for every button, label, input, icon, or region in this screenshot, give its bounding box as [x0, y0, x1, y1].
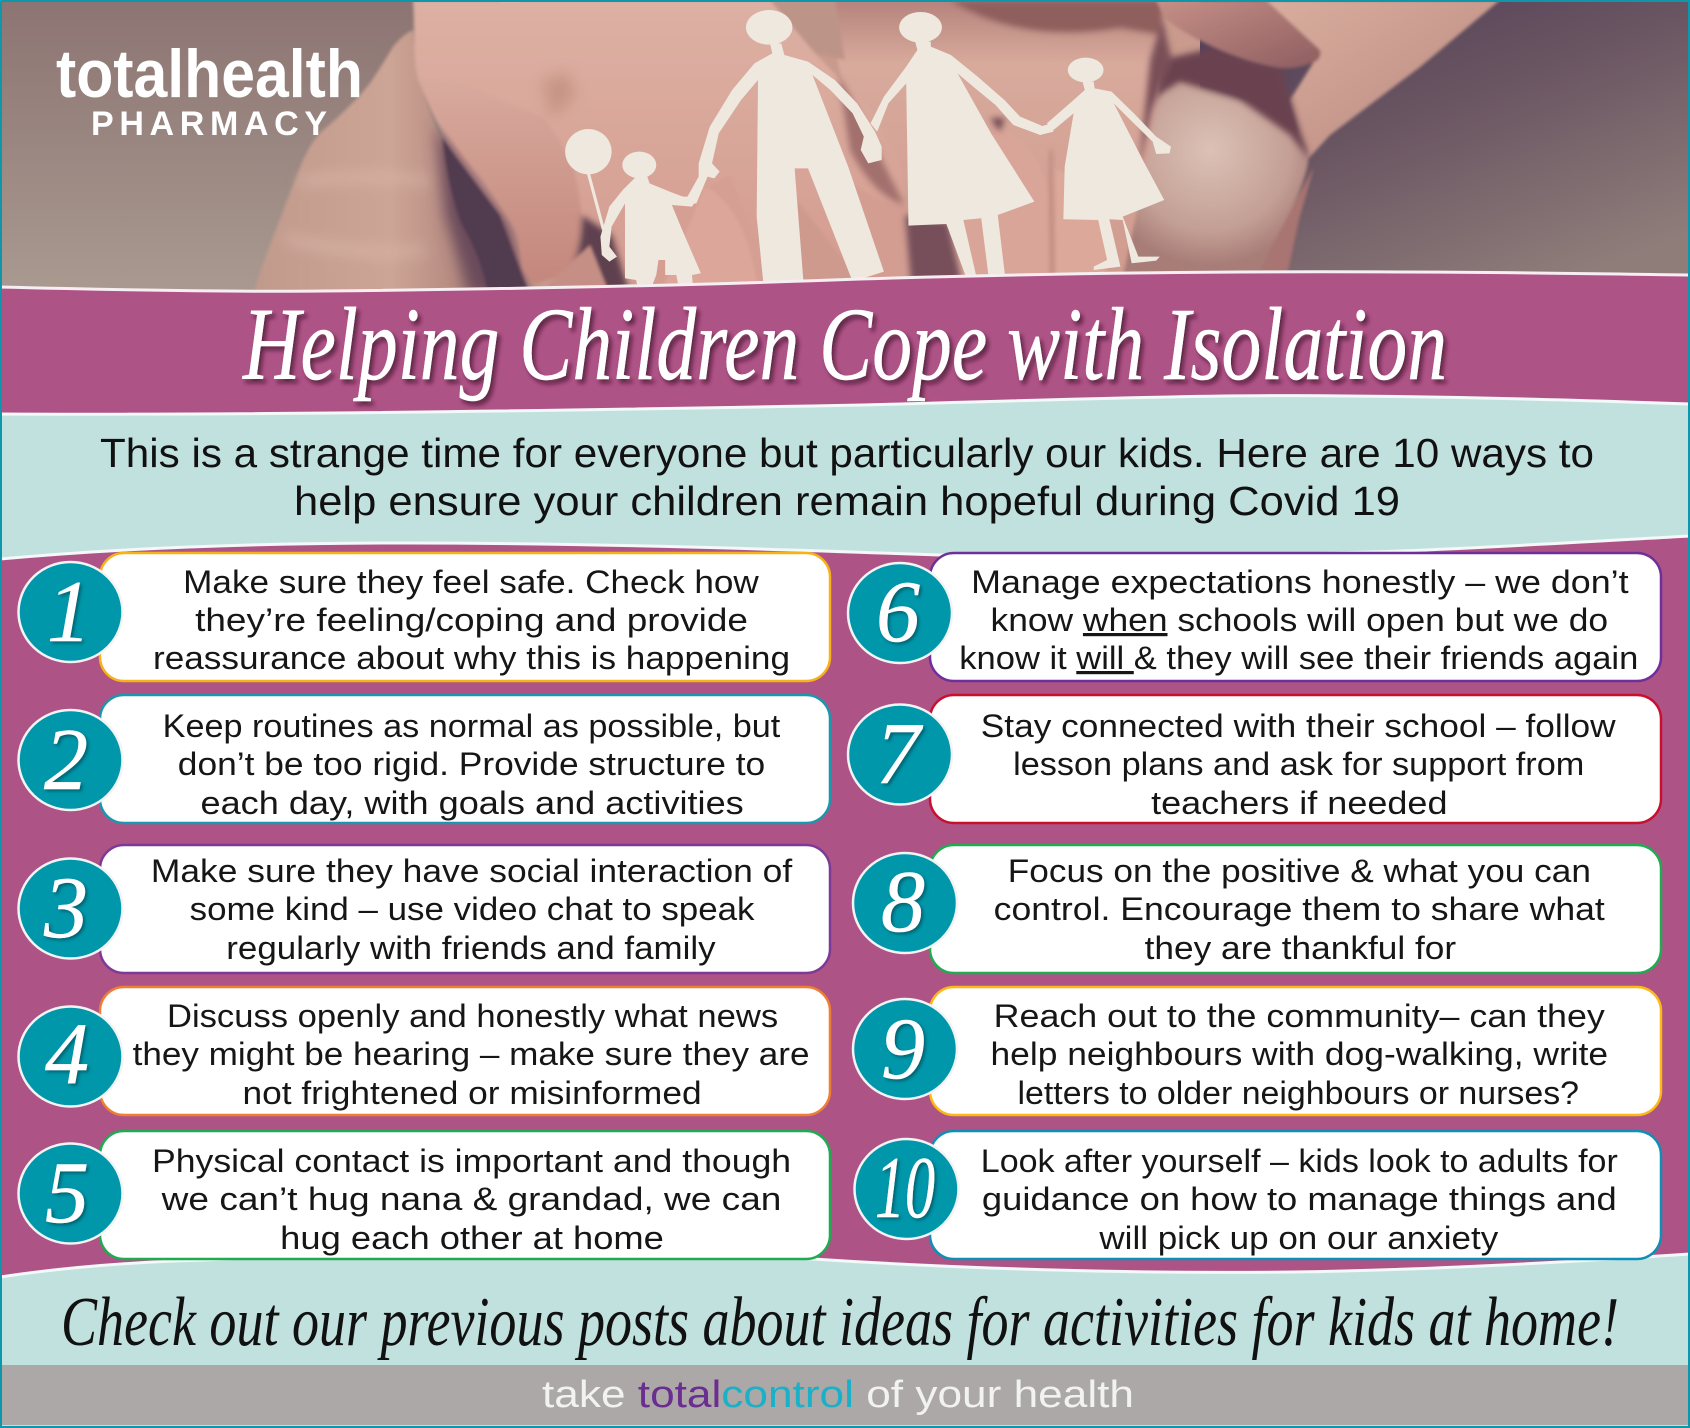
- tip 4: [100, 987, 830, 1115]
- tip 9 text: Reach out to the community– can they: [994, 998, 1605, 1034]
- tip 9 text: [990, 998, 1608, 1111]
- right palm: [835, 2, 1160, 272]
- tip 9: [930, 987, 1661, 1115]
- tip 4 text: [133, 998, 810, 1111]
- right hand knuckle: [1123, 83, 1310, 272]
- tip 2 text: don’t be too rigid. Provide structure to: [178, 746, 765, 782]
- tip 10 text: Look after yourself – kids look to adults for: [981, 1143, 1618, 1179]
- dark gap under thumb: [572, 212, 630, 285]
- sliver of wrist: [1260, 170, 1314, 270]
- tip 3 text: regularly with friends and family: [226, 930, 716, 966]
- shadow above knuckle: [1150, 48, 1310, 160]
- tip 4 text: Discuss openly and honestly what news: [167, 998, 778, 1034]
- tip 5 text: we can’t hug nana & grandad, we can: [161, 1181, 781, 1217]
- fingers lower right: [964, 256, 1046, 274]
- tip 6 text: know when schools will open but we do: [990, 602, 1608, 638]
- photo: paper family cut-outs: [565, 10, 1171, 287]
- number badge 6: [848, 563, 952, 663]
- tip 7 text: Stay connected with their school – follow: [981, 708, 1617, 744]
- intro text: This is a strange time for everyone but particularly our kids. Here are 10 ways to: [100, 430, 1594, 476]
- number badge 2: 2: [44, 712, 88, 809]
- tip 3 text: [151, 853, 792, 966]
- finger, top right: [1156, 0, 1321, 68]
- lower fingers: [666, 275, 678, 284]
- tip 8 text: control. Encourage them to share what: [994, 891, 1605, 927]
- left palm: [413, 0, 906, 295]
- paper figure: father: [672, 10, 884, 283]
- tip 8 text: [994, 853, 1605, 966]
- tip 2 text: each day, with goals and activities: [200, 785, 744, 821]
- tip 8: [930, 845, 1661, 973]
- tip 7: [930, 695, 1661, 823]
- tip 8 text: Focus on the positive & what you can: [1008, 853, 1591, 889]
- right-palm fold: [950, 0, 1162, 35]
- tip 10 text: will pick up on our anxiety: [1098, 1220, 1498, 1256]
- number badge 10: 10: [875, 1140, 935, 1237]
- tip 3 text: Make sure they have social interaction of: [151, 853, 792, 889]
- tip 6 text: know it will & they will see their friends again: [959, 640, 1638, 676]
- paper figure: mother: [871, 12, 1054, 278]
- photo: paper family held in cupped hands: [0, 0, 1690, 295]
- paper figure: daughter: [1047, 58, 1171, 270]
- number badge 1: [18, 562, 122, 662]
- number badge 9: [853, 999, 957, 1099]
- logo: totalhealth pharmacy: [56, 36, 363, 143]
- dark gap between thumb and back hand: [442, 138, 530, 295]
- intro text: [100, 430, 1594, 524]
- number badge 5: [18, 1144, 122, 1244]
- logo: totalhealth pharmacy: PHARMACY: [91, 105, 327, 143]
- tip 1 text: Make sure they feel safe. Check how: [183, 564, 760, 600]
- left thumb: [448, 131, 582, 282]
- tip 3: [100, 845, 830, 973]
- number badge 3: 3: [43, 860, 88, 957]
- number badge 1: 1: [47, 564, 91, 661]
- paper figure: child with balloon: [565, 129, 701, 287]
- tip 1 text: [153, 564, 790, 676]
- tip 7 text: [981, 708, 1617, 821]
- intro text: help ensure your children remain hopeful during Covid 19: [294, 478, 1400, 524]
- tip 10: [930, 1131, 1661, 1259]
- tip 7 text: lesson plans and ask for support from: [1013, 746, 1584, 782]
- tip 1 text: they’re feeling/coping and provide: [195, 602, 748, 638]
- tip 6 text: Manage expectations honestly – we don’t: [971, 564, 1629, 600]
- footer panel: [0, 1252, 1690, 1428]
- soft shadow beside thumb: [436, 125, 530, 295]
- photo background: fabric: [0, 0, 1690, 295]
- tip 1 text: reassurance about why this is happening: [153, 640, 790, 676]
- tip 9 text: letters to older neighbours or nurses?: [1018, 1075, 1579, 1111]
- tagline text: take total control of your health: [542, 1374, 1134, 1416]
- tip 5: [100, 1131, 830, 1259]
- tip 3 text: some kind – use video chat to speak: [190, 891, 756, 927]
- number badge 8: [853, 853, 957, 953]
- number badge 7: [848, 704, 952, 804]
- tip 9 text: help neighbours with dog-walking, write: [990, 1036, 1608, 1072]
- tip 8 text: they are thankful for: [1145, 930, 1456, 966]
- tagline bar: [0, 1365, 1690, 1425]
- number badge 6: 6: [876, 564, 920, 661]
- dark line beside right palm: [1138, 20, 1172, 175]
- number badge 9: 9: [881, 1001, 925, 1098]
- logo: totalhealth pharmacy: totalhealth: [56, 36, 363, 112]
- tip 7 text: teachers if needed: [1151, 785, 1448, 821]
- tip 4 text: not frightened or misinformed: [242, 1075, 702, 1111]
- forearm, top right: [1262, 0, 1500, 160]
- tip 1: [100, 553, 830, 681]
- tip 6 text: [959, 564, 1638, 676]
- number badge 7: 7: [876, 706, 924, 803]
- tip 10 text: [981, 1143, 1618, 1256]
- number badge 4: 4: [45, 1006, 89, 1103]
- number badge 8: 8: [881, 854, 925, 951]
- tip 4 text: they might be hearing – make sure they are: [133, 1036, 810, 1072]
- back hand, lower left: [254, 30, 475, 290]
- tip 2 text: Keep routines as normal as possible, but: [163, 708, 780, 744]
- tip 6: [930, 553, 1661, 681]
- tip 2: [100, 695, 830, 823]
- tip 5 text: Physical contact is important and though: [152, 1143, 791, 1179]
- palm crease: [542, 72, 576, 113]
- number badge 5: 5: [45, 1145, 89, 1242]
- intro panel: [0, 396, 1690, 559]
- number badge 4: [18, 1006, 122, 1106]
- tip 10 text: guidance on how to manage things and: [982, 1181, 1617, 1217]
- mid gap: [774, 2, 845, 60]
- photo: hands: [253, 0, 1500, 295]
- number badge 2: [18, 710, 122, 810]
- tip 2 text: [163, 708, 780, 821]
- knuckle highlights on back hand: [285, 178, 430, 252]
- tip 5 text: [152, 1143, 791, 1256]
- number badge 3: [18, 858, 122, 958]
- tip 5 text: hug each other at home: [280, 1220, 664, 1256]
